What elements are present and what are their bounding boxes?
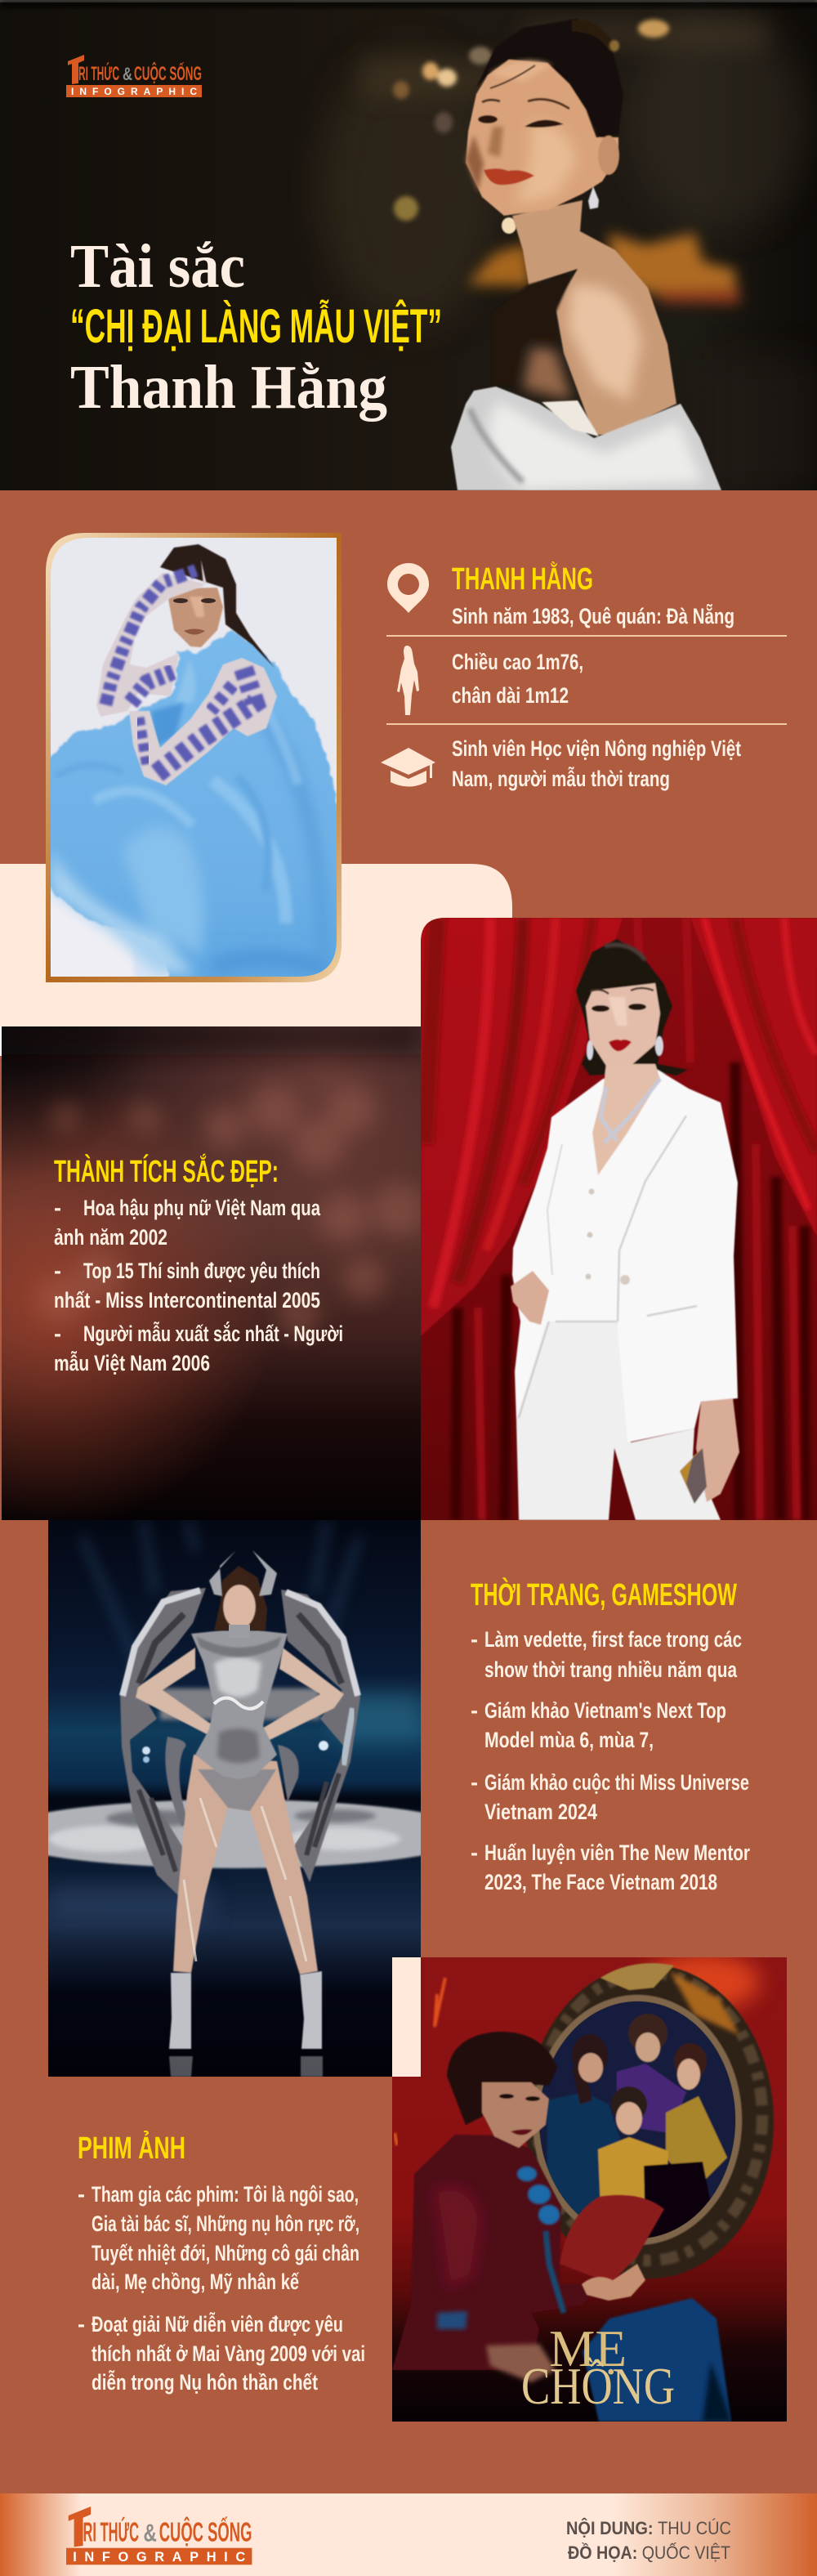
height and leg length: Chiều cao 1m76, — [452, 650, 583, 674]
title: Tài sắc — [70, 232, 245, 301]
text block: fashion, gameshow list: show thời trang nhiều năm qua — [484, 1657, 738, 1682]
text block: film list: Tham gia các phim: Tôi là ngôi sao, — [92, 2182, 359, 2207]
education and occupation — [452, 736, 741, 791]
mirror interior with four women — [531, 1994, 743, 2247]
poster title: CHỒNG — [521, 2357, 675, 2415]
text block: fashion, gameshow list: - — [471, 1698, 478, 1723]
icon: location pin — [387, 563, 429, 613]
lips — [609, 1040, 632, 1051]
text block: fashion, gameshow list: - — [471, 1770, 478, 1795]
text block: beauty achievements list: - — [54, 1259, 61, 1283]
left curtain — [421, 918, 623, 1336]
credits: NỘI DUNG: THU CÚC — [566, 2518, 731, 2538]
text block: fashion, gameshow list: Làm vedette, first face trong các — [484, 1627, 742, 1652]
hand on hip — [511, 1271, 549, 1325]
red fan — [560, 2195, 664, 2283]
logo: header: CUỘC SỐNG — [134, 62, 202, 85]
poster title: MẸ — [549, 2319, 627, 2377]
white dress — [451, 387, 721, 490]
logo: footer: INFOGRAPHIC — [73, 2550, 245, 2565]
logo: header: & — [123, 64, 132, 84]
text block: fashion, gameshow list: 2023, The Face Vietnam 2018 — [484, 1870, 717, 1894]
photo frame: blue dress — [46, 533, 342, 982]
lapels and folds — [619, 1116, 686, 1250]
text block: film list: - — [78, 2312, 85, 2337]
text block: fashion, gameshow list: - — [471, 1627, 478, 1652]
hair — [214, 1566, 267, 1630]
blurred background lights — [393, 20, 669, 221]
bokeh lights — [38, 1084, 425, 1337]
blurred fire glow — [467, 233, 739, 304]
silver moon stage — [0, 1800, 475, 1868]
shadow on chest — [513, 275, 572, 386]
logo: header — [66, 55, 202, 97]
cream band — [0, 864, 512, 1026]
lips — [484, 168, 534, 185]
text block: film list — [78, 2182, 365, 2395]
right wing — [281, 1590, 360, 1882]
title: “CHỊ ĐẠI LÀNG MẪU VIỆT” — [70, 300, 442, 353]
face — [586, 983, 660, 1066]
title — [70, 232, 442, 422]
panel: main accomplishments background — [0, 1022, 425, 1520]
text block: fashion, gameshow list — [471, 1627, 750, 1894]
text block: film list: thích nhất ở Mai Vàng 2009 với vai — [92, 2341, 365, 2366]
right curtain — [690, 918, 817, 1237]
text block: beauty achievements list — [54, 1196, 343, 1375]
neck and chest — [592, 1064, 660, 1175]
height and leg length — [452, 650, 583, 708]
text block: beauty achievements list: Người mẫu xuất sắc nhất - Người — [83, 1321, 343, 1346]
text block: film list: Tuyết nhiệt đới, Những cô gái chân — [92, 2241, 359, 2265]
portrait woman — [466, 19, 676, 435]
main woman — [392, 2032, 599, 2370]
logo: footer — [66, 2507, 252, 2565]
text block: beauty achievements list: Hoa hậu phụ nữ Việt Nam qua — [83, 1196, 321, 1220]
neck, shoulder and arm — [512, 200, 676, 435]
photo: model in blue tulle dress — [46, 538, 340, 981]
text block: fashion, gameshow list: Vietnam 2024 — [484, 1800, 597, 1824]
face — [466, 60, 618, 216]
credits — [566, 2518, 731, 2563]
arms — [136, 1648, 225, 1737]
text block: fashion, gameshow list: Giám khảo Vietnam's Next Top — [484, 1698, 726, 1723]
hair — [160, 544, 275, 668]
logo: footer: CUỘC SỐNG — [159, 2516, 252, 2547]
jacket — [512, 1070, 738, 1442]
small hip wings — [165, 1737, 188, 1827]
photo: model in silver wings — [0, 1520, 475, 2077]
birth and hometown: Sinh năm 1983, Quê quán: Đà Nẵng — [452, 602, 734, 628]
text block: film list: diễn trong Nụ hôn thần chết — [92, 2369, 318, 2395]
hair — [576, 939, 688, 1076]
necklace — [600, 1079, 660, 1143]
logo: header: RI THỨC — [78, 62, 119, 85]
raised arm with printed glove — [96, 560, 207, 717]
text block: beauty achievements list: ảnh năm 2002 — [54, 1225, 167, 1250]
photo: model in white suit — [421, 918, 817, 1520]
silver boots — [169, 1973, 191, 2049]
cream accent beside poster — [392, 1957, 421, 2077]
suit person — [511, 939, 739, 1520]
text block: beauty achievements list: - — [54, 1196, 61, 1220]
face — [168, 588, 223, 647]
text block: film list: dài, Mẹ chồng, Mỹ nhân kế — [92, 2270, 300, 2294]
ear and earring — [598, 136, 619, 175]
back curtain folds — [456, 918, 805, 1520]
text block: beauty achievements list: mẫu Việt Nam 2006 — [54, 1350, 210, 1375]
legs — [173, 1755, 318, 1974]
profile name: THANH HẰNG — [452, 561, 593, 597]
silver armour — [191, 1630, 288, 1779]
footer band — [0, 2493, 817, 2576]
text block: film list: Đoạt giải Nữ diễn viên được yêu — [92, 2311, 343, 2337]
logo: header: INFOGRAPHIC — [71, 86, 197, 97]
poster title — [521, 2319, 675, 2415]
mirror frame — [525, 1963, 774, 2279]
text block: beauty achievements list: Top 15 Thí sinh được yêu thích — [83, 1259, 320, 1283]
logo: footer: & — [144, 2520, 157, 2547]
text block: beauty achievements list: nhất - Miss Intercontinental 2005 — [54, 1288, 320, 1313]
height and leg length: chân dài 1m12 — [452, 683, 569, 708]
text block: fashion, gameshow list: - — [471, 1840, 478, 1865]
left wing — [120, 1588, 206, 1896]
film poster: Mẹ Chồng — [392, 1953, 787, 2422]
title: Thanh Hằng — [70, 353, 387, 422]
hero banner — [0, 0, 817, 490]
section heading: film: PHIM ẢNH — [78, 2130, 185, 2166]
section heading: beauty achievements: THÀNH TÍCH SẮC ĐẸP: — [54, 1153, 279, 1189]
text block: beauty achievements list: - — [54, 1322, 61, 1346]
text block: fashion, gameshow list: Model mùa 6, mùa 7, — [484, 1728, 654, 1752]
wing reflection band — [160, 1688, 319, 1720]
pearl buttons — [588, 1188, 595, 1195]
logo: footer: RI THỨC — [83, 2516, 139, 2547]
text block: film list: - — [78, 2182, 85, 2207]
folded arm with printed glove — [129, 658, 277, 785]
tulle dress — [46, 630, 340, 981]
earrings — [587, 1040, 593, 1060]
hand with clutch — [696, 1398, 739, 1502]
credits: ĐỒ HỌA: QUỐC VIỆT — [568, 2542, 730, 2563]
headpiece — [209, 1550, 277, 1596]
icon: woman silhouette — [397, 646, 419, 715]
icon: graduation cap — [381, 748, 435, 786]
text block: film list: Gia tài bác sĩ, Những nụ hôn rực rỡ, — [92, 2212, 359, 2236]
face — [223, 1585, 256, 1629]
hair and bun — [476, 19, 623, 137]
blue skirt — [583, 2298, 731, 2422]
education and occupation: Nam, người mẫu thời trang — [452, 766, 670, 791]
trousers — [516, 1322, 721, 1520]
